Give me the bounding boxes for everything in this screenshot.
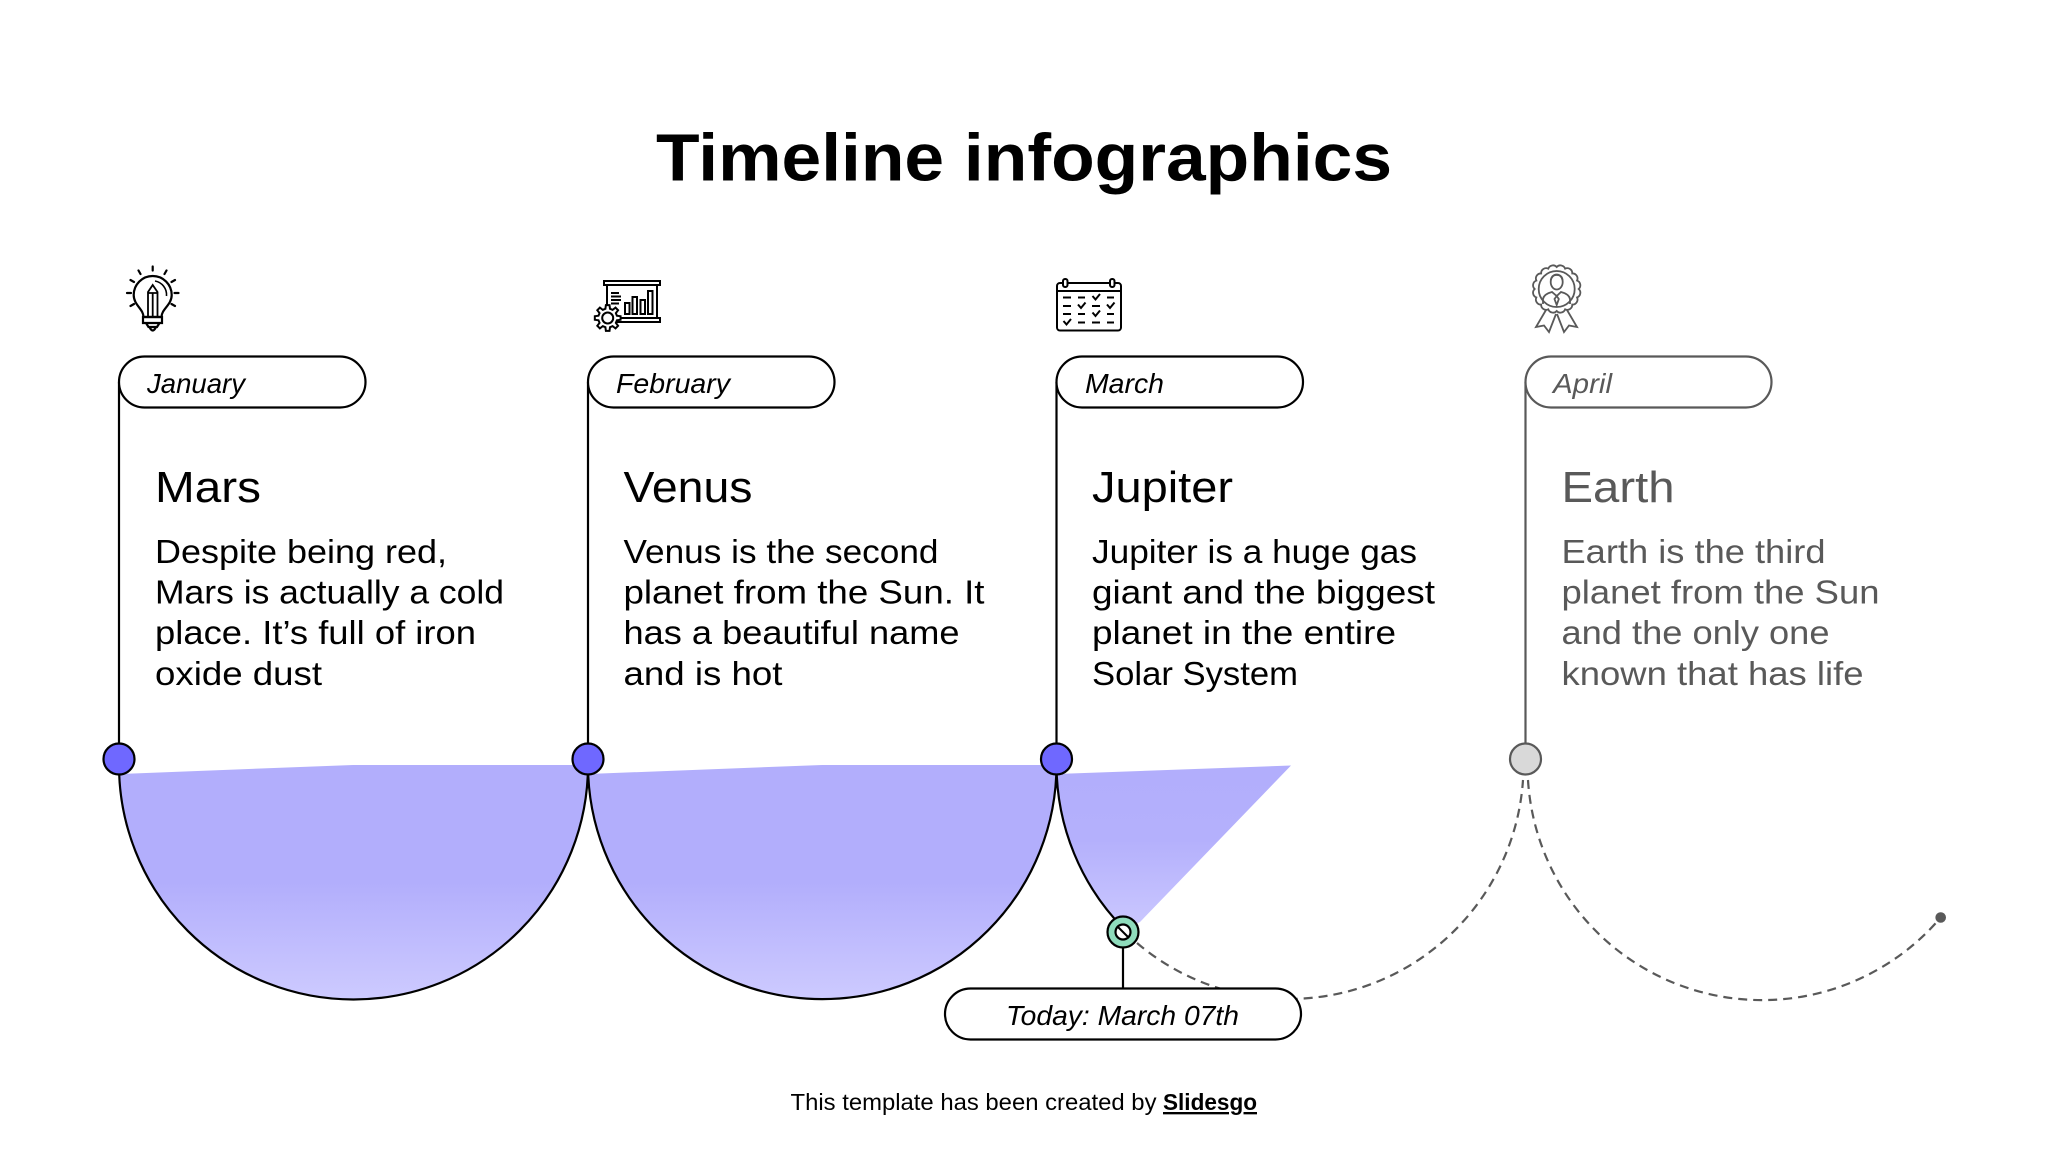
end point	[1935, 912, 1946, 923]
pill: April	[1526, 356, 1772, 408]
footer credit: This template has been created by	[790, 1089, 1157, 1115]
pill: January: January	[146, 368, 247, 399]
connector	[1122, 947, 1124, 990]
icon: presentation board with gear	[595, 281, 660, 331]
callout: today date	[945, 988, 1301, 1040]
heading: Mars: Mars	[155, 463, 261, 512]
callout: today date: Today: March 07th	[1006, 1000, 1239, 1031]
text block: Mars description: Mars is actually a cold	[155, 574, 504, 610]
area: March progress fill	[1056, 765, 1291, 929]
text block: Mars description: oxide dust	[155, 655, 322, 692]
icon: light bulb with pencil	[127, 266, 178, 330]
text block: Mars description: place. It’s full of iron	[155, 614, 476, 651]
area: February progress fill	[588, 765, 1056, 999]
node: February	[572, 744, 604, 774]
heading: Earth: Earth	[1562, 463, 1674, 512]
text block: Earth description: Earth is the third	[1562, 533, 1826, 570]
text block: Jupiter description: Solar System	[1092, 655, 1298, 692]
text block: Venus description: and is hot	[624, 655, 782, 692]
text block: Mars description: Despite being red,	[155, 533, 447, 570]
pill: February	[588, 356, 834, 408]
chart: timeline arcs	[119, 765, 1946, 1000]
stem	[1055, 382, 1058, 750]
today marker and callout	[945, 916, 1301, 1040]
text block: Venus description: planet from the Sun. It	[624, 574, 984, 610]
heading: Jupiter: Jupiter	[1092, 463, 1233, 512]
text block: Earth description: and the only one	[1562, 614, 1830, 651]
column: April	[1510, 265, 1880, 774]
icon: award rosette with person	[1533, 265, 1580, 332]
text block: Venus description: has a beautiful name	[624, 614, 960, 651]
marker: today	[1108, 916, 1138, 948]
arc: April remaining, dashed	[1528, 780, 1941, 1000]
icon: calendar with checks	[1057, 279, 1121, 330]
title: Timeline infographics	[656, 120, 1392, 196]
column: March	[1041, 279, 1435, 774]
node: April	[1510, 744, 1541, 774]
pill: March	[1056, 356, 1303, 408]
pill: April: April	[1551, 368, 1613, 399]
node: January	[104, 744, 134, 774]
area: January progress fill	[119, 765, 588, 1000]
text block: Jupiter description: Jupiter is a huge gas	[1092, 533, 1417, 570]
text block: Jupiter description: giant and the biggest	[1092, 574, 1435, 610]
stem	[1524, 382, 1527, 750]
pill: March: March	[1085, 368, 1164, 399]
arc: March elapsed	[1056, 765, 1124, 929]
stem	[118, 382, 120, 750]
arc: March remaining, dashed	[1137, 780, 1523, 999]
heading: Venus: Venus	[624, 463, 752, 512]
column: January	[104, 266, 504, 774]
pill: February: February	[616, 368, 732, 399]
text block: Venus description: Venus is the second	[624, 533, 938, 570]
pill: January	[119, 356, 366, 408]
arc: January	[119, 765, 588, 1000]
text block: Earth description: planet from the Sun	[1562, 574, 1880, 610]
node: March	[1041, 744, 1072, 774]
text block: Earth description: known that has life	[1562, 655, 1864, 692]
column: February	[572, 281, 984, 774]
arc: February	[588, 765, 1056, 999]
footer credit: Slidesgo	[1163, 1089, 1257, 1115]
stem	[587, 382, 589, 750]
text block: Jupiter description: planet in the entire	[1092, 614, 1396, 651]
